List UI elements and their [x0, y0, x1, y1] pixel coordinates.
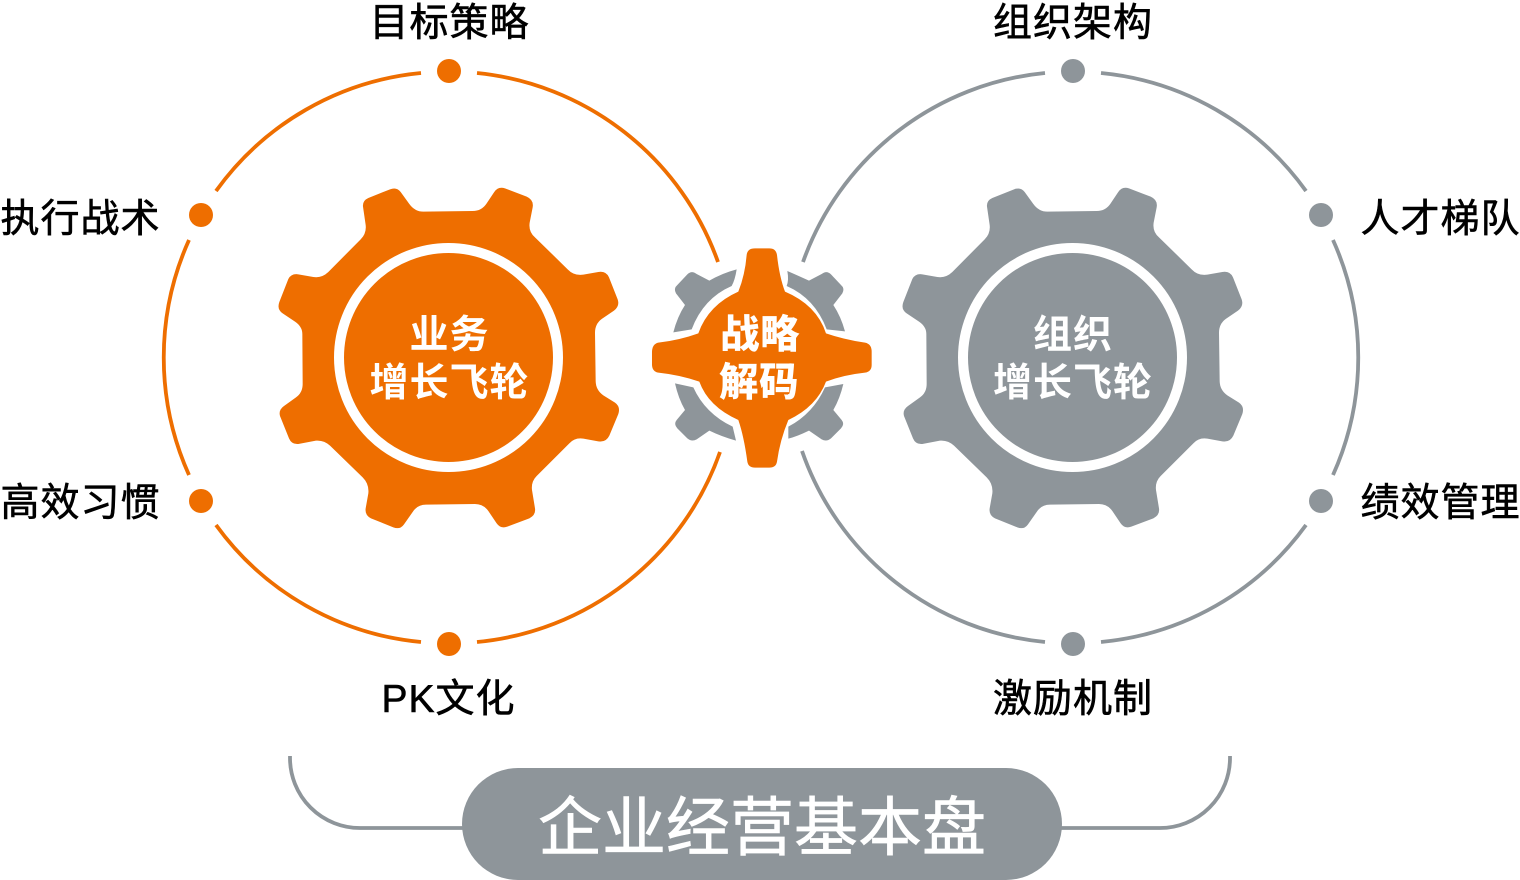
- labels: organization flywheel items: 人才梯队: [1360, 198, 1520, 241]
- labels: organization flywheel items: [993, 2, 1520, 721]
- text: grey gear title: 组织: [1033, 314, 1113, 357]
- text: center gear title: [719, 313, 800, 405]
- icon: orange gear: [279, 188, 619, 528]
- text: orange gear title: 业务: [409, 314, 490, 357]
- panel: orange flywheel ring: [164, 73, 720, 642]
- labels: business flywheel items: 执行战术: [0, 198, 161, 241]
- labels: organization flywheel items: 组织架构: [993, 2, 1153, 45]
- text: orange gear title: [369, 314, 530, 405]
- labels: business flywheel items: PK文化: [381, 678, 516, 721]
- labels: business flywheel items: 高效习惯: [0, 482, 161, 525]
- text: orange gear title: 增长飞轮: [369, 362, 530, 405]
- text: grey gear title: 增长飞轮: [993, 362, 1153, 405]
- dots: orange ring nodes: [189, 59, 461, 656]
- foundation pill: [462, 768, 1062, 880]
- icon: central strategy gear: [652, 248, 872, 468]
- icon: grey gear: [903, 188, 1243, 528]
- labels: organization flywheel items: 绩效管理: [1360, 482, 1520, 525]
- bracket: foundation: [290, 756, 1230, 828]
- dots: grey ring nodes: [1061, 59, 1333, 656]
- text: grey gear title: [993, 314, 1153, 405]
- labels: business flywheel items: [0, 2, 530, 721]
- panel: grey flywheel ring: [802, 73, 1358, 642]
- text: center gear title: 解码: [719, 361, 799, 405]
- labels: organization flywheel items: 激励机制: [993, 678, 1153, 721]
- labels: business flywheel items: 目标策略: [369, 2, 530, 45]
- foundation pill: 企业经营基本盘: [538, 792, 986, 864]
- text: center gear title: 战略: [720, 313, 800, 357]
